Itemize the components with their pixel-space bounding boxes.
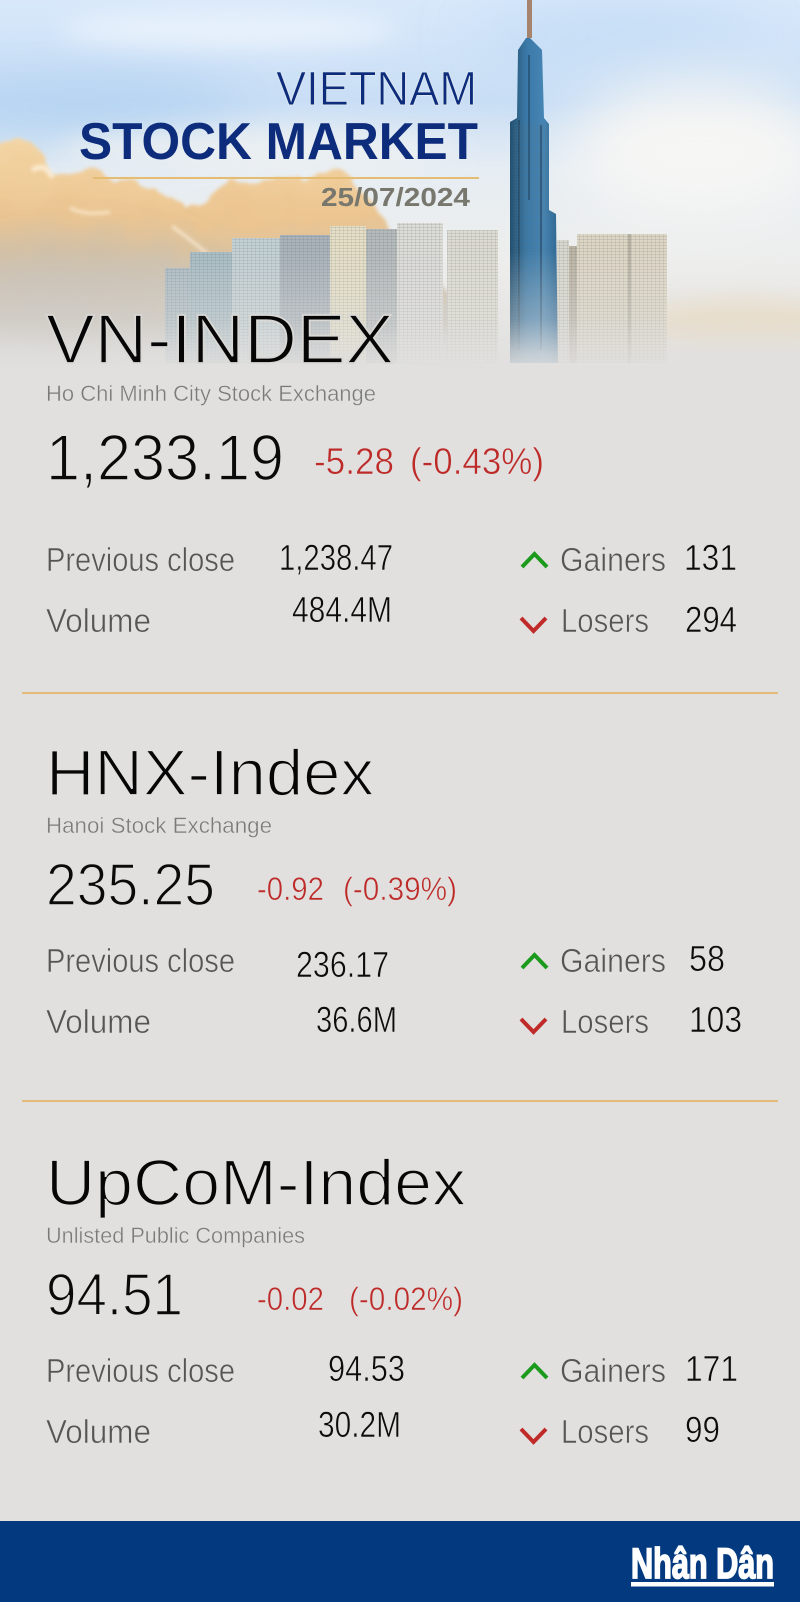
exchange name: Hanoi Stock Exchange [46, 813, 272, 838]
panel: VN-INDEX [46, 300, 737, 640]
volume: 36.6M [316, 999, 397, 1040]
footer bar [0, 1521, 800, 1602]
residential towers right [557, 234, 667, 363]
losers [521, 599, 737, 640]
volume [46, 589, 392, 639]
index value: 235.25 [46, 852, 215, 918]
gainers [522, 537, 737, 578]
volume [46, 1404, 401, 1450]
heading: HNX-Index: HNX-Index [46, 736, 374, 809]
gainers: Gainers [560, 942, 666, 979]
date rule [93, 177, 479, 179]
losers: 103 [689, 999, 742, 1040]
change: (-0.02%) [349, 1281, 463, 1317]
change: (-0.39%) [343, 871, 457, 907]
gainers [522, 1348, 738, 1389]
clouds [0, 143, 480, 410]
title [79, 63, 479, 212]
losers [521, 1409, 720, 1450]
previous close [46, 537, 393, 578]
residential towers left [165, 223, 498, 363]
change [257, 1281, 463, 1317]
gainers: Gainers [560, 1352, 666, 1389]
title line: STOCK MARKET: STOCK MARKET [79, 113, 478, 171]
index value: 94.51 [46, 1262, 183, 1328]
hero photo: sky, clouds and skyline [0, 0, 800, 363]
heading: UpCoM-Index: UpCoM-Index [46, 1146, 466, 1219]
losers: Losers [561, 602, 649, 639]
volume: Volume [46, 602, 151, 639]
change: (-0.43%) [410, 441, 544, 482]
change: -0.92 [257, 871, 324, 907]
volume: Volume [46, 1413, 151, 1450]
gainers: 131 [684, 537, 737, 578]
change: -0.02 [257, 1281, 324, 1317]
previous close: 236.17 [296, 944, 389, 985]
losers: Losers [561, 1413, 649, 1450]
index value: 1,233.19 [46, 421, 284, 494]
previous close: 94.53 [328, 1348, 405, 1389]
change [314, 441, 544, 482]
previous close [46, 1348, 405, 1389]
volume: Volume [46, 1003, 151, 1040]
exchange name: Ho Chi Minh City Stock Exchange [46, 381, 376, 406]
exchange name: Unlisted Public Companies [46, 1223, 305, 1248]
title line: VIETNAM: VIETNAM [276, 63, 477, 116]
panel: UpCoM-Index [46, 1146, 738, 1450]
previous close: Previous close [46, 942, 235, 979]
gainers: Gainers [560, 541, 666, 578]
heading: VN-INDEX: VN-INDEX [46, 300, 394, 378]
previous close: Previous close [46, 541, 235, 578]
losers: 99 [685, 1409, 720, 1450]
gainers [522, 938, 725, 979]
previous close [46, 942, 389, 985]
losers: Losers [561, 1003, 649, 1040]
Landmark tower [510, 0, 558, 364]
volume: 484.4M [292, 589, 392, 630]
gainers: 171 [685, 1348, 738, 1389]
change: -5.28 [314, 441, 394, 482]
panel: HNX-Index [46, 736, 742, 1040]
previous close: Previous close [46, 1352, 235, 1389]
volume [46, 999, 397, 1040]
previous close: 1,238.47 [279, 537, 393, 578]
change [257, 871, 457, 907]
losers: 294 [685, 599, 737, 640]
date: 25/07/2024 [321, 182, 471, 212]
gainers: 58 [689, 938, 725, 979]
volume: 30.2M [318, 1404, 401, 1445]
losers [521, 999, 742, 1040]
